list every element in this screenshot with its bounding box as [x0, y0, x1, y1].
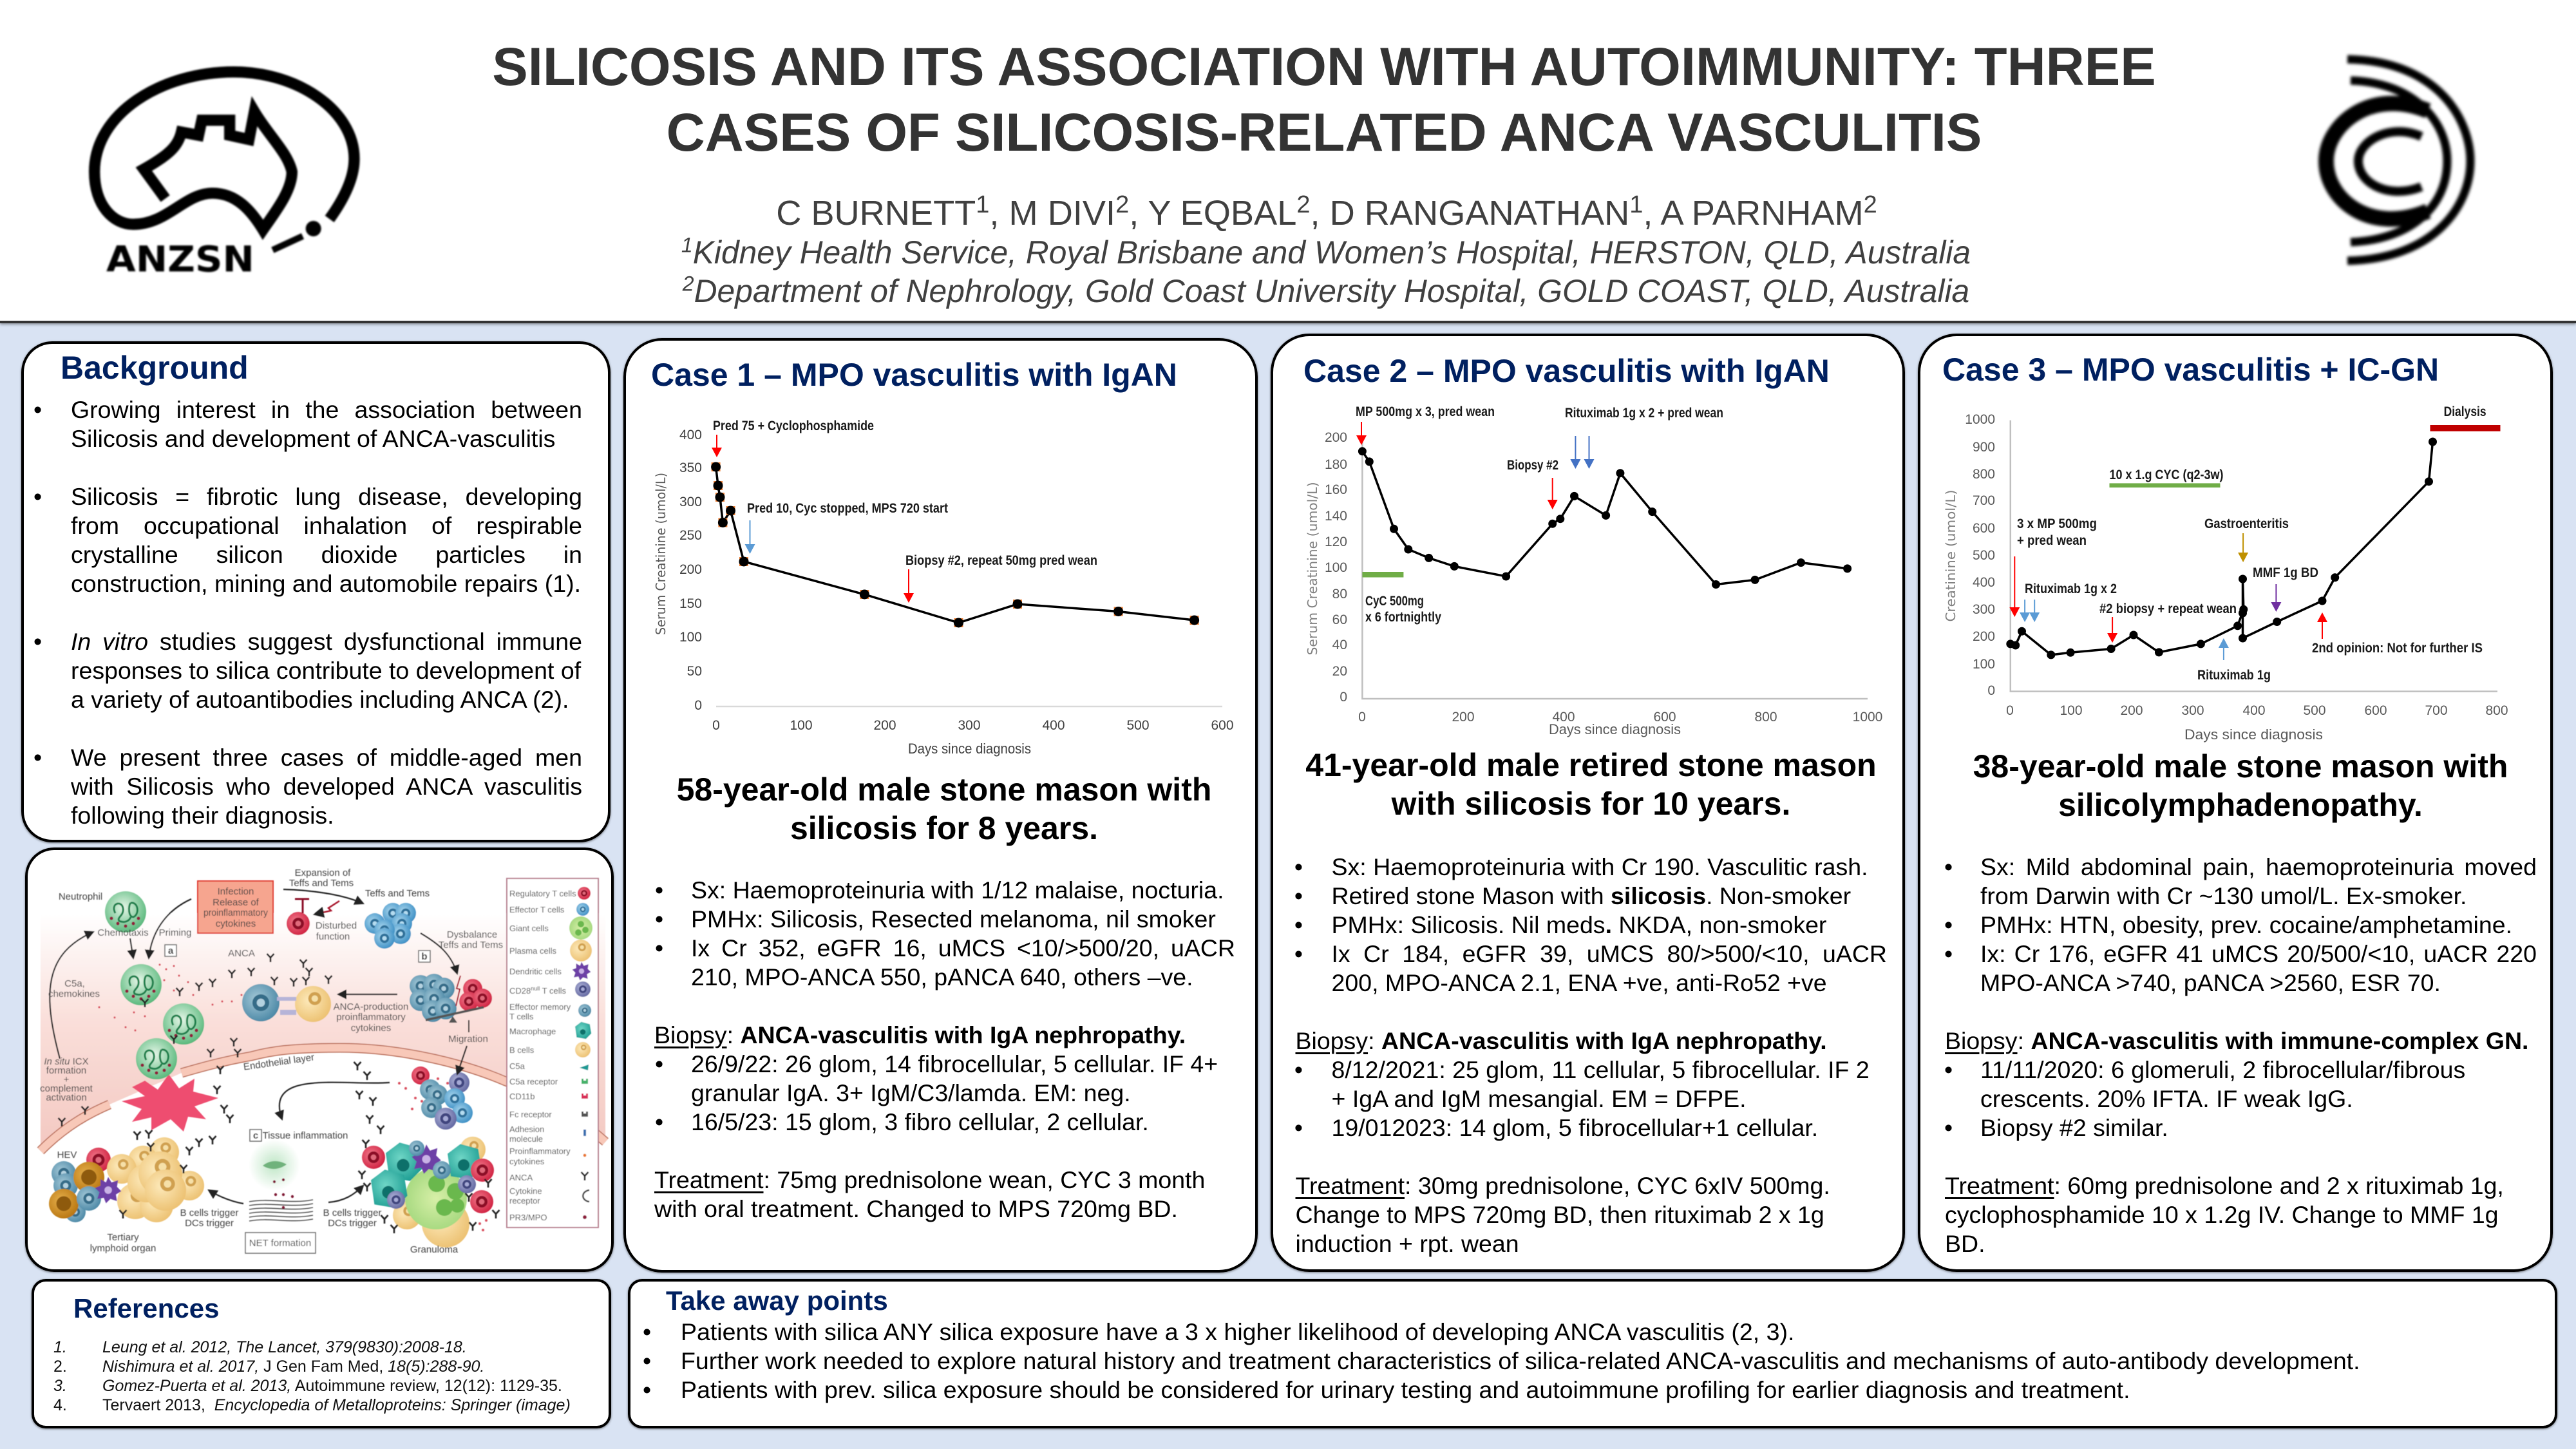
- text block: case 2 details: •: [1294, 1114, 1303, 1141]
- text block: background bullets: crystalline silicon dioxide particles in: [71, 541, 582, 568]
- text block: case 2 details: Retired stone Mason with silicosis. Non-smoker: [1332, 882, 1851, 909]
- text block: case 3 details: MPO-ANCA >740, pANCA >2560, ESR 70.: [1980, 969, 2441, 996]
- panel: background: •: [33, 483, 42, 510]
- authors: C BURNETT1, M DIVI2, Y EQBAL2, D RANGANATHAN1, A PARNHAM2: [776, 191, 1877, 232]
- chart: case 2 creatinine: 160: [1325, 482, 1347, 497]
- diagram labels: formation: [46, 1065, 86, 1076]
- diagram labels: B cells trigger: [323, 1208, 381, 1218]
- chart: case 2 creatinine: 60: [1332, 612, 1347, 627]
- diagram labels: Migration: [448, 1034, 488, 1045]
- text block: case 1 details: 210, MPO-ANCA 550, pANCA 640, others –ve.: [691, 963, 1193, 990]
- subheading: case 1: silicosis for 8 years.: [790, 810, 1098, 846]
- chart: case 3 creatinine: Rituximab 1g x 2: [2025, 582, 2117, 596]
- text block: case 1 details: •: [655, 1050, 663, 1077]
- panel: pathogenesis figure: [25, 848, 614, 1272]
- diagram labels: Teffs and Tems: [439, 940, 503, 951]
- chart: case 1 creatinine: 400: [1042, 718, 1065, 733]
- chart: case 3 creatinine: #2 biopsy + repeat wean: [2099, 601, 2237, 616]
- diagram labels: Chemotaxis: [97, 927, 149, 938]
- chart: case 2 creatinine: 600: [1653, 710, 1676, 724]
- diagram labels: proinflammatory: [204, 907, 268, 918]
- text block: case 3 details: 11/11/2020: 6 glomeruli, 2 fibrocellular/fibrous: [1980, 1056, 2465, 1083]
- text block: case 3 details: from Darwin with Cr ~130 umol/L. Ex-smoker.: [1980, 882, 2467, 909]
- diagram labels: B cells trigger: [180, 1208, 238, 1218]
- panel: take away points: •: [643, 1318, 651, 1345]
- chart: case 1 creatinine: Pred 75 + Cyclophosphamide: [713, 419, 874, 433]
- reference list: 4.: [53, 1396, 67, 1414]
- chart: case 3 creatinine: 700: [1973, 493, 1995, 508]
- legend: Effector T cells: [509, 905, 565, 914]
- chart: case 2 creatinine: 20: [1332, 664, 1347, 679]
- panel: case 3: [1918, 334, 2553, 1272]
- reference list: Leung et al. 2012, The Lancet, 379(9830):2008-18.: [102, 1338, 467, 1356]
- text block: case 2 details: Sx: Haemoproteinuria with Cr 190. Vasculitic rash.: [1332, 853, 1868, 880]
- text block: case 3 details: •: [1944, 1114, 1953, 1141]
- text block: case 1 details: •: [655, 876, 663, 904]
- chart: case 3 creatinine: 100: [2060, 703, 2083, 718]
- chart: case 3 creatinine: Gastroenteritis: [2204, 516, 2289, 531]
- panel: background: •: [33, 627, 42, 654]
- diagram: ANCA vasculitis pathogenesis: [37, 867, 609, 1255]
- legend: Dendritic cells: [509, 967, 562, 976]
- chart: case 2 creatinine: 0: [1358, 710, 1366, 724]
- legend: Proinflammatory: [509, 1146, 571, 1156]
- chart: case 3 creatinine: 200: [2120, 703, 2143, 718]
- legend: CD11b: [509, 1092, 535, 1101]
- chart: case 1 creatinine: 250: [679, 528, 702, 543]
- reference list: Nishimura et al. 2017, J Gen Fam Med, 18(5):288-90.: [102, 1358, 484, 1376]
- subheading: case 2: [1305, 747, 1877, 822]
- reference list: Gomez-Puerta et al. 2013, Autoimmune review, 12(12): 1129-35.: [102, 1377, 562, 1395]
- chart: case 1 creatinine: 300: [679, 495, 702, 509]
- text block: background bullets: responses to silica contribute to development of: [71, 657, 581, 684]
- chart: case 2 creatinine: Biopsy #2: [1507, 458, 1558, 473]
- chart: case 2 creatinine: 200: [1452, 710, 1475, 724]
- subheading: case 3: 38-year-old male stone mason with: [1973, 748, 2508, 784]
- panel: references: [32, 1279, 611, 1428]
- ANCA antibodies: [58, 954, 500, 1233]
- chart: case 2 creatinine: 40: [1332, 638, 1347, 652]
- chart: case 2 creatinine: MP 500mg x 3, pred wean: [1356, 404, 1495, 419]
- chart: case 1 creatinine: 100: [679, 630, 702, 645]
- take away bullets: Further work needed to explore natural history and treatment characteristics of silica-related ANCA-vasculitis and mechanisms of auto-antibody development.: [681, 1347, 2360, 1374]
- text block: case 1 details: •: [655, 934, 663, 961]
- affiliations: [681, 233, 1971, 309]
- take away bullets: Patients with silica ANY silica exposure have a 3 x higher likelihood of developing ANCA vasculitis (2, 3).: [681, 1318, 1794, 1345]
- chart: case 1 creatinine: 150: [679, 596, 702, 611]
- panel: background: •: [33, 395, 42, 422]
- text block: case 1 details: Biopsy: ANCA-vasculitis with IgA nephropathy.: [654, 1021, 1186, 1048]
- reference list: 1.: [53, 1338, 67, 1356]
- diagram labels: proinflammatory: [336, 1012, 406, 1023]
- text block: case 3 details: crescents. 20% IFTA. IF weak IgG.: [1980, 1085, 2353, 1112]
- text block: case 3 details: cyclophosphamide 10 x 1.2g IV. Change to MMF 1g: [1945, 1201, 2499, 1228]
- chart: case 2 creatinine: 400: [1552, 710, 1575, 724]
- chart: case 2 creatinine: 100: [1325, 560, 1347, 575]
- chart: case 3 creatinine: Rituximab 1g: [2197, 668, 2271, 683]
- chart: case 1 creatinine: Biopsy #2, repeat 50mg pred wean: [905, 553, 1097, 568]
- subheading: case 1: 58-year-old male stone mason with: [677, 772, 1211, 808]
- diagram labels: Granuloma: [410, 1244, 459, 1255]
- chart: case 2 creatinine: 200: [1325, 430, 1347, 445]
- text block: case 2 details: Change to MPS 720mg BD, then rituximab 2 x 1g: [1296, 1200, 1824, 1227]
- diagram labels: function: [316, 931, 350, 942]
- chart: case 3 creatinine: 900: [1973, 440, 1995, 455]
- legend: molecule: [509, 1134, 543, 1144]
- chart: case 3 creatinine: 1000: [1965, 412, 1995, 427]
- chart: case 3 creatinine: 500: [2303, 703, 2326, 718]
- text block: case 2 details: [1294, 853, 1887, 1257]
- text block: case 1 details: [654, 876, 1235, 1222]
- panel: take away points: [628, 1279, 2557, 1428]
- dysbalance see-saw: [410, 974, 492, 1023]
- diagram: ANCA vasculitis pathogenesis: b: [421, 951, 428, 962]
- subheading: case 3: [1973, 748, 2508, 823]
- text block: case 1 details: 26/9/22: 26 glom, 14 fibrocellular, 5 cellular. IF 4+: [691, 1050, 1218, 1077]
- legend: Plasma cells: [509, 946, 556, 956]
- take away bullets: [643, 1318, 2360, 1403]
- inflammation burst: [122, 1074, 218, 1132]
- diagram labels: Infection: [218, 886, 254, 897]
- text block: case 2 details: 8/12/2021: 25 glom, 11 cellular, 5 fibrocellular. IF 2: [1332, 1056, 1870, 1083]
- legend: PR3/MPO: [509, 1213, 547, 1222]
- diagram labels: Disturbed: [316, 920, 357, 931]
- reference list: 2.: [53, 1358, 67, 1376]
- text block: case 3 details: Sx: Mild abdominal pain, haemoproteinuria moved: [1980, 853, 2537, 880]
- text block: background bullets: with Silicosis who developed ANCA vasculitis: [71, 773, 582, 800]
- heading: case 3: Case 3 – MPO vasculitis + IC-GN: [1942, 352, 2439, 388]
- text block: case 3 details: •: [1944, 853, 1953, 880]
- chart: case 2 creatinine: 800: [1754, 710, 1777, 724]
- panel: case 1: [623, 338, 1258, 1273]
- text block: case 1 details: Sx: Haemoproteinuria with 1/12 malaise, nocturia.: [691, 876, 1224, 904]
- chart: case 1 creatinine: Pred 10, Cyc stopped, MPS 720 start: [747, 501, 948, 516]
- diagram labels: activation: [46, 1092, 87, 1103]
- legend: receptor: [509, 1196, 540, 1206]
- chart: case 3 creatinine: Creatinine (umol/L): [1943, 489, 1958, 622]
- chart: case 1 creatinine: 100: [790, 718, 813, 733]
- text block: case 2 details: PMHx: Silicosis. Nil meds. NKDA, non-smoker: [1332, 911, 1826, 938]
- chart: case 1 creatinine: 500: [1126, 718, 1150, 733]
- logo: concentric C: [2316, 53, 2477, 268]
- diagram labels: Release of: [213, 897, 260, 908]
- diagram labels: +: [64, 1074, 70, 1085]
- text block: case 2 details: •: [1294, 882, 1303, 909]
- arrows: [50, 889, 467, 1204]
- text block: case 3 details: •: [1944, 1056, 1953, 1083]
- chart: case 1 creatinine: Days since diagnosis: [908, 741, 1031, 757]
- chart: case 3 creatinine: [1943, 404, 2508, 743]
- text block: background bullets: from occupational inhalation of respirable: [71, 511, 582, 538]
- legend: [507, 878, 598, 1227]
- neutrophils: [105, 891, 204, 1079]
- text block: case 2 details: •: [1294, 1056, 1303, 1083]
- diagram labels: complement: [40, 1083, 93, 1094]
- legend: B cells: [509, 1045, 535, 1055]
- legend: ANCA: [509, 1173, 533, 1182]
- reference list: 3.: [53, 1377, 67, 1395]
- diagram labels: cytokines: [216, 918, 256, 929]
- text block: case 2 details: induction + rpt. wean: [1296, 1230, 1519, 1257]
- diagram labels: Endothelial layer: [243, 1052, 315, 1073]
- granuloma: [362, 1137, 494, 1247]
- heading: background: Background: [61, 350, 249, 386]
- text block: case 3 details: Biopsy: ANCA-vasculitis with immune-complex GN.: [1945, 1027, 2528, 1054]
- diagram labels: Dysbalance: [447, 929, 497, 940]
- chart: case 3 creatinine: 300: [2181, 703, 2204, 718]
- text block: case 2 details: •: [1294, 853, 1303, 880]
- text block: case 3 details: •: [1944, 940, 1953, 967]
- diagram labels: DCs trigger: [328, 1218, 377, 1229]
- logo: ANZSN: [88, 65, 361, 280]
- chart: case 1 creatinine: 400: [679, 428, 702, 442]
- chart: case 1 creatinine: 600: [1211, 718, 1234, 733]
- title: SILICOSIS AND ITS ASSOCIATION WITH AUTOIMMUNITY: THREE: [492, 37, 2156, 97]
- text block: case 3 details: •: [1944, 911, 1953, 938]
- diagram labels: Priming: [159, 927, 191, 938]
- text block: background bullets: Silicosis = fibrotic lung disease, developing: [71, 483, 582, 510]
- chart: case 3 creatinine: 400: [2242, 703, 2266, 718]
- infection box: [198, 881, 273, 933]
- text block: background bullets: [33, 395, 582, 828]
- chart: case 3 creatinine: 300: [1973, 602, 1995, 617]
- chart: case 3 creatinine: Dialysis: [2444, 404, 2486, 419]
- tissue background: [41, 913, 605, 1151]
- panel letter tags and NET box: [165, 945, 430, 1253]
- affiliations: 2Department of Nephrology, Gold Coast University Hospital, GOLD COAST, QLD, Australia: [683, 272, 1969, 309]
- legend: CD28: [509, 986, 531, 996]
- legend: Effector memory: [509, 1002, 571, 1012]
- legend: C5a receptor: [509, 1077, 558, 1086]
- chart: case 2 creatinine: CyC 500mg: [1365, 594, 1424, 609]
- text block: case 2 details: Treatment: 30mg prednisolone, CYC 6xIV 500mg.: [1296, 1172, 1830, 1199]
- diagram labels: NET formation: [249, 1238, 311, 1249]
- chart: case 2 creatinine: 180: [1325, 457, 1347, 472]
- affiliations: 1Kidney Health Service, Royal Brisbane and Women’s Hospital, HERSTON, QLD, Australia: [681, 233, 1971, 270]
- diagram: ANCA vasculitis pathogenesis: c: [253, 1130, 258, 1141]
- text block: case 1 details: granular IgA. 3+ IgM/C3/lamda. EM: neg.: [691, 1079, 1131, 1106]
- text block: background bullets: a variety of autoantibodies including ANCA (2).: [71, 685, 569, 712]
- chart: case 2 creatinine: x 6 fortnightly: [1365, 610, 1441, 625]
- chart: case 1 creatinine: 350: [679, 460, 702, 475]
- text block: case 3 details: BD.: [1945, 1230, 1985, 1257]
- text block: case 2 details: •: [1294, 940, 1303, 967]
- chart: case 2 creatinine: 80: [1332, 587, 1347, 601]
- chart: case 1 creatinine: 200: [679, 562, 702, 577]
- chart: case 3 creatinine: 100: [1973, 657, 1995, 672]
- panel: case 2: [1271, 334, 1905, 1272]
- heading: case 1: Case 1 – MPO vasculitis with IgAN: [651, 357, 1177, 393]
- panel: take away points: •: [643, 1347, 651, 1374]
- subheading: case 3: silicolymphadenopathy.: [2058, 787, 2423, 823]
- chart: case 2 creatinine: 120: [1325, 535, 1347, 549]
- text block: case 3 details: Treatment: 60mg prednisolone and 2 x rituximab 1g,: [1945, 1172, 2504, 1199]
- diagram labels: Expansion of: [295, 867, 351, 878]
- title: CASES OF SILICOSIS-RELATED ANCA VASCULITIS: [667, 102, 1982, 162]
- text block: case 1 details: with oral treatment. Changed to MPS 720mg BD.: [654, 1195, 1178, 1222]
- legend: T cells: [509, 1012, 534, 1021]
- chart: case 3 creatinine: 500: [1973, 548, 1995, 563]
- text block: background bullets: following their diagnosis.: [71, 801, 334, 828]
- chart: case 1 creatinine: 0: [712, 718, 720, 733]
- text block: case 2 details: Ix Cr 184, eGFR 39, uMCS 80/>500/<10, uACR: [1332, 940, 1887, 967]
- chart: case 2 creatinine: 0: [1340, 690, 1347, 705]
- subheading: case 1: [677, 772, 1211, 846]
- text block: case 1 details: PMHx: Silicosis, Resected melanoma, nil smoker: [691, 905, 1216, 933]
- chart: case 1 creatinine: 200: [873, 718, 896, 733]
- NET formation: [249, 1139, 313, 1221]
- diagram labels: [40, 867, 503, 1255]
- reference list: Tervaert 2013, Encyclopedia of Metalloproteins: Springer (image): [102, 1396, 571, 1414]
- text block: case 1 details: Treatment: 75mg prednisolone wean, CYC 3 month: [654, 1166, 1205, 1193]
- take away bullets: Patients with prev. silica exposure should be considered for urinary testing and autoimmune profiling for earlier diagnosis and treatment.: [681, 1376, 2130, 1403]
- ANCA-producing cells: [242, 984, 331, 1022]
- text block: case 3 details: Biopsy #2 similar.: [1980, 1114, 2168, 1141]
- diagram labels: cytokines: [351, 1023, 391, 1034]
- chart: case 3 creatinine: 0: [2006, 703, 2014, 718]
- chart: case 3 creatinine: 2nd opinion: Not for further IS: [2312, 641, 2483, 656]
- panel: take away points: •: [643, 1376, 651, 1403]
- text block: case 2 details: •: [1294, 911, 1303, 938]
- chart: case 2 creatinine: 1000: [1853, 710, 1882, 724]
- text block: background bullets: Silicosis and development of ANCA-vasculitis: [71, 425, 555, 452]
- legend: Regulatory T cells: [509, 889, 576, 898]
- text block: case 1 details: Ix Cr 352, eGFR 16, uMCS <10/>500/20, uACR: [691, 934, 1235, 961]
- text block: case 3 details: Ix: Cr 176, eGFR 41 uMCS 20/500/<10, uACR 220: [1980, 940, 2537, 967]
- cytokine dots: [98, 963, 488, 1231]
- text block: case 3 details: PMHx: HTN, obesity, prev. cocaine/amphetamine.: [1980, 911, 2512, 938]
- chart: case 3 creatinine: 700: [2425, 703, 2448, 718]
- text block: case 2 details: Biopsy: ANCA-vasculitis with IgA nephropathy.: [1296, 1027, 1827, 1054]
- chart: case 3 creatinine: 0: [1987, 683, 1995, 698]
- chart: case 2 creatinine: Days since diagnosis: [1549, 721, 1681, 737]
- chart: case 3 creatinine: + pred wean: [2017, 533, 2087, 548]
- chart: case 3 creatinine: 800: [2485, 703, 2508, 718]
- text block: case 3 details: [1944, 853, 2537, 1257]
- diagram labels: Tertiary: [107, 1232, 139, 1243]
- disturbed regulatory cell: [287, 899, 339, 935]
- chart: case 2 creatinine: [1305, 404, 1882, 737]
- diagram labels: Neutrophil: [59, 891, 102, 902]
- legend: Giant cells: [509, 923, 549, 933]
- chart: case 3 creatinine: 3 x MP 500mg: [2017, 516, 2097, 531]
- title: [492, 37, 2156, 162]
- reference list: [53, 1338, 571, 1414]
- Teffs and Tems cluster: [365, 903, 416, 949]
- logo: ANZSN: ANZSN: [106, 239, 254, 280]
- endothelial layer: [41, 1048, 605, 1151]
- subheading: case 2: 41-year-old male retired stone mason: [1305, 747, 1877, 783]
- migrating cells: [412, 1066, 473, 1130]
- chart: case 2 creatinine: Rituximab 1g x 2 + pred wean: [1565, 406, 1723, 421]
- diagram labels: ANCA: [228, 948, 255, 959]
- legend: Adhesion: [509, 1124, 544, 1134]
- panel: background: [21, 341, 611, 842]
- chart: case 2 creatinine: Serum Creatinine (umol/L): [1305, 482, 1320, 656]
- text block: background bullets: construction, mining and automobile repairs (1).: [71, 569, 581, 596]
- chart: case 1 creatinine: Serum Creatinine (umol/L): [653, 473, 668, 635]
- text block: case 1 details: •: [655, 905, 663, 933]
- heading: case 2: Case 2 – MPO vasculitis with IgAN: [1303, 353, 1830, 389]
- chart: case 3 creatinine: 600: [1973, 521, 1995, 536]
- chart: case 1 creatinine: 300: [958, 718, 981, 733]
- text block: case 2 details: + IgA and IgM mesangial. EM = DFPE.: [1332, 1084, 1747, 1112]
- chart: case 3 creatinine: Days since diagnosis: [2184, 726, 2323, 743]
- text block: case 1 details: 16/5/23: 15 glom, 3 fibro cellular, 2 cellular.: [691, 1108, 1149, 1135]
- text block: background bullets: We present three cases of middle-aged men: [71, 743, 582, 770]
- tertiary lymphoid organ: [49, 1137, 204, 1222]
- diagram labels: Teffs and Tems: [365, 888, 430, 899]
- diagram labels: In situ ICX: [44, 1056, 89, 1067]
- chart: case 3 creatinine: 400: [1973, 575, 1995, 590]
- chart: case 3 creatinine: 800: [1973, 467, 1995, 482]
- text block: background bullets: Growing interest in the association between: [71, 395, 582, 422]
- chart: case 3 creatinine: 10 x 1.g CYC (q2-3w): [2110, 468, 2223, 482]
- chart: case 1 creatinine: [653, 419, 1234, 757]
- chart: case 2 creatinine: 140: [1325, 509, 1347, 524]
- diagram labels: DCs trigger: [185, 1218, 234, 1229]
- chart: case 1 creatinine: 0: [694, 698, 702, 713]
- header band: [0, 0, 2576, 323]
- legend: T cells: [540, 986, 566, 996]
- text block: background bullets: In vitro studies suggest dysfunctional immune: [71, 627, 582, 654]
- chart: case 3 creatinine: 600: [2364, 703, 2387, 718]
- chart: case 1 creatinine: 50: [687, 664, 702, 679]
- legend: null: [531, 985, 540, 992]
- text block: case 2 details: 200, MPO-ANCA 2.1, ENA +ve, anti-Ro52 +ve: [1332, 969, 1827, 996]
- subheading: case 2: with silicosis for 10 years.: [1392, 786, 1790, 822]
- panel: background: •: [33, 743, 42, 770]
- legend: Fc receptor: [509, 1110, 552, 1119]
- diagram labels: Teffs and Tems: [289, 878, 354, 889]
- heading: references: References: [73, 1293, 219, 1323]
- diagram labels: Tissue inflammation: [263, 1130, 348, 1141]
- chart: case 3 creatinine: 200: [1973, 629, 1995, 644]
- diagram labels: ANCA-production: [334, 1001, 408, 1012]
- diagram labels: chemokines: [48, 989, 100, 999]
- legend: Cytokine: [509, 1186, 542, 1196]
- heading: take away points: Take away points: [666, 1285, 888, 1316]
- legend: cytokines: [509, 1157, 545, 1166]
- diagram labels: lymphoid organ: [90, 1243, 156, 1254]
- legend: Macrophage: [509, 1027, 556, 1036]
- diagram: ANCA vasculitis pathogenesis: a: [168, 945, 174, 956]
- text block: case 1 details: •: [655, 1108, 663, 1135]
- diagram labels: C5a,: [64, 978, 85, 989]
- legend: C5a: [509, 1061, 526, 1071]
- text block: case 2 details: 19/012023: 14 glom, 5 fibrocellular+1 cellular.: [1332, 1114, 1818, 1141]
- diagram labels: HEV: [57, 1150, 77, 1160]
- chart: case 3 creatinine: MMF 1g BD: [2253, 565, 2318, 580]
